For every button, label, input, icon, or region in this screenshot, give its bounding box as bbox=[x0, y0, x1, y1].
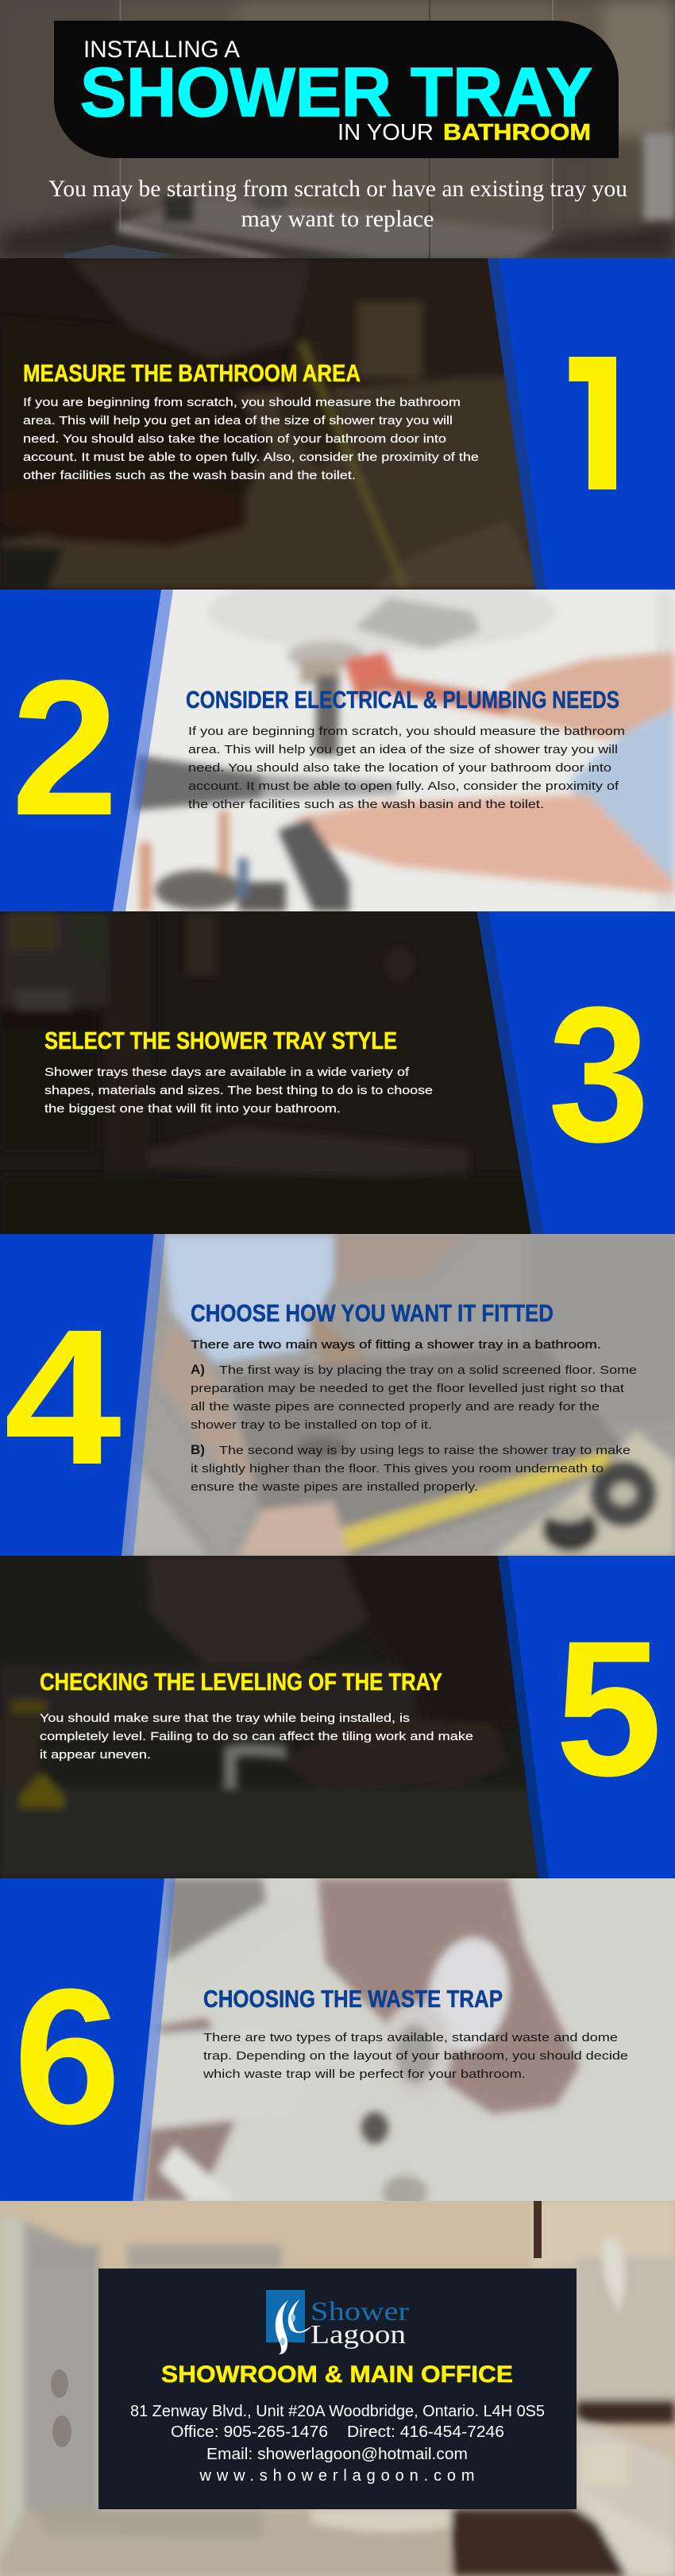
body text: account. It must be able to open fully. Also, consider the proximity of the bbox=[23, 451, 479, 464]
logo bbox=[266, 2290, 410, 2354]
body text: If you are beginning from scratch, you should measure the bathroom bbox=[188, 725, 625, 738]
heading: CHECKING THE LEVELING OF THE TRAY bbox=[40, 1668, 442, 1696]
heading: CHOOSE HOW YOU WANT IT FITTED bbox=[191, 1299, 554, 1327]
body text bbox=[202, 2031, 628, 2081]
body text: Shower trays these days are available in a wide variety of bbox=[44, 1066, 410, 1079]
body text: other facilities such as the wash basin and the toilet. bbox=[23, 469, 356, 482]
blue band bbox=[0, 1878, 164, 2201]
blue band bbox=[0, 1234, 154, 1556]
subtitle: You may be starting from scratch or have an existing tray you bbox=[48, 176, 627, 202]
logo wordmark lagoon: Lagoon bbox=[310, 2320, 406, 2350]
blue band bbox=[489, 911, 675, 1234]
title box bbox=[54, 21, 619, 158]
body text: the other facilities such as the wash basin and the toilet. bbox=[188, 798, 544, 811]
body text bbox=[23, 396, 479, 482]
logo wordmark shower: Shower bbox=[310, 2297, 410, 2327]
option b: The second way is by using legs to raise the shower tray to make bbox=[219, 1444, 631, 1457]
title: shower tray: SHOWER TRAY bbox=[80, 54, 592, 131]
subtitle bbox=[48, 176, 627, 232]
body text: need. You should also take the location of your bathroom door into bbox=[23, 432, 446, 446]
option a: A) bbox=[191, 1362, 205, 1377]
title: bathroom accent: BATHROOM bbox=[443, 120, 591, 145]
office heading: SHOWROOM & MAIN OFFICE bbox=[161, 2361, 513, 2388]
photo: waste trap in hands bbox=[133, 1878, 675, 2201]
number 2: 2 bbox=[11, 640, 118, 856]
option a: shower tray to be installed on top of it. bbox=[191, 1418, 432, 1432]
body text: There are two types of traps available, standard waste and dome bbox=[203, 2031, 618, 2044]
blue band shadow bbox=[498, 1556, 675, 1878]
heading: CHOOSING THE WASTE TRAP bbox=[203, 1985, 503, 2013]
number 3: 3 bbox=[548, 967, 650, 1182]
body text: the biggest one that will fit into your bathroom. bbox=[44, 1102, 341, 1116]
body text: You should make sure that the tray while being installed, is bbox=[40, 1712, 410, 1725]
subtitle: may want to replace bbox=[241, 206, 434, 232]
direct phone: Direct: 416-454-7246 bbox=[347, 2423, 504, 2441]
body text: it appear uneven. bbox=[40, 1748, 151, 1762]
photo: finished bathroom bbox=[0, 2201, 675, 2576]
photo: shower enclosure bbox=[0, 0, 675, 258]
title: in your bathroom: IN YOUR bbox=[338, 120, 434, 145]
number 4: 4 bbox=[4, 1290, 122, 1505]
number 6: 6 bbox=[14, 1949, 121, 2164]
email: Email: showerlagoon@hotmail.com bbox=[206, 2446, 468, 2463]
photo: measuring floor bbox=[0, 258, 535, 590]
photo: dark shower room bbox=[0, 911, 531, 1234]
photo: man levelling tray bbox=[122, 1234, 675, 1556]
blue band shadow bbox=[476, 911, 675, 1234]
address: 81 Zenway Blvd., Unit #20A Woodbridge, Ontario. L4H 0S5 bbox=[130, 2403, 545, 2420]
panel: step 5 bbox=[0, 1556, 675, 1878]
website: www.showerlagoon.com bbox=[199, 2467, 475, 2485]
body text: trap. Depending on the layout of your bathroom, you should decide bbox=[203, 2049, 628, 2063]
option b: B) bbox=[191, 1442, 205, 1457]
panel: step 4 bbox=[0, 1234, 675, 1556]
heading: MEASURE THE BATHROOM AREA bbox=[23, 359, 361, 387]
panel: step 2 bbox=[0, 572, 675, 911]
body text: completely level. Failing to do so can affect the tiling work and make bbox=[40, 1730, 473, 1743]
body text: area. This will help you get an idea of the size of shower tray you will bbox=[23, 414, 453, 427]
body text: which waste trap will be perfect for your bathroom. bbox=[202, 2067, 526, 2081]
blue band bbox=[508, 1556, 675, 1878]
number 1: 1 bbox=[548, 315, 655, 531]
heading: SELECT THE SHOWER TRAY STYLE bbox=[44, 1027, 397, 1054]
option a: The first way is by placing the tray on a solid screened floor. Some bbox=[219, 1363, 637, 1377]
body text: account. It must be able to open fully. Also, consider the proximity of bbox=[188, 779, 619, 793]
photo: checking level bbox=[0, 1556, 538, 1878]
option a: preparation may be needed to get the floor levelled just right so that bbox=[191, 1382, 625, 1395]
blue band highlight bbox=[0, 1878, 176, 2201]
body text bbox=[188, 725, 625, 811]
body text: need. You should also take the location of your bathroom door into bbox=[188, 761, 611, 775]
photo: plumber with wrench bbox=[113, 590, 675, 911]
blue band shadow bbox=[488, 258, 675, 590]
option b bbox=[191, 1442, 631, 1494]
option b: ensure the waste pipes are installed properly. bbox=[191, 1480, 478, 1494]
panel: step 1 bbox=[0, 258, 675, 590]
title: installing a: INSTALLING A bbox=[83, 37, 240, 63]
blue band highlight bbox=[0, 1234, 165, 1556]
panel: hero header bbox=[0, 0, 675, 258]
number 5: 5 bbox=[555, 1601, 662, 1816]
office phone: Office: 905-265-1476 bbox=[171, 2423, 328, 2441]
option a bbox=[191, 1362, 637, 1432]
panel: step 3 bbox=[0, 911, 675, 1261]
blue band bbox=[499, 258, 675, 590]
contact box bbox=[98, 2269, 577, 2509]
panel: step 6 bbox=[0, 1878, 675, 2210]
body text bbox=[44, 1066, 433, 1116]
blue band highlight bbox=[0, 590, 173, 911]
body text: shapes, materials and sizes. The best thing to do is to choose bbox=[44, 1084, 433, 1097]
body text bbox=[40, 1712, 473, 1762]
number 1 bbox=[569, 357, 616, 489]
option a: all the waste pipes are connected properly and are ready for the bbox=[191, 1400, 600, 1414]
blue band bbox=[0, 590, 161, 911]
panel: footer contact bbox=[0, 2201, 675, 2576]
option b: it slightly higher than the floor. This gives you room underneath to bbox=[191, 1462, 604, 1476]
body text: If you are beginning from scratch, you should measure the bathroom bbox=[23, 396, 461, 409]
intro line: There are two main ways of fitting a shower tray in a bathroom. bbox=[191, 1338, 601, 1352]
body text: area. This will help you get an idea of the size of shower tray you will bbox=[188, 743, 618, 756]
logo mark bbox=[266, 2290, 311, 2354]
